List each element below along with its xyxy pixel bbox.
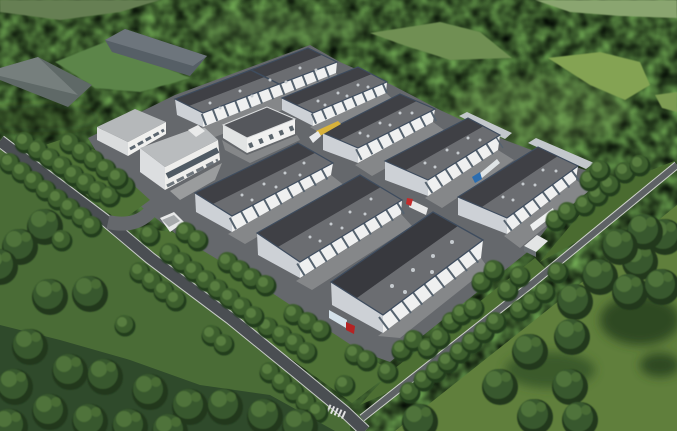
building: D warehouse (323, 94, 448, 176)
tree rows right upper (546, 155, 650, 232)
forest light patches (0, 12, 630, 145)
outer road right (362, 165, 677, 418)
building: G warehouse (195, 143, 345, 244)
distant warehouse left (0, 57, 92, 107)
green strip left of site (30, 140, 150, 222)
truck: yellow and white (309, 121, 341, 143)
canopy gate right (524, 235, 548, 257)
crosswalk (328, 408, 346, 416)
roof strip behind building E (459, 112, 512, 139)
site pavement (88, 45, 590, 362)
outer tree row on lower road (130, 262, 328, 424)
right forest cluster (557, 214, 677, 320)
building: C small warehouse (222, 107, 300, 163)
building: H warehouse (257, 175, 412, 290)
tree rows right inner (378, 260, 568, 404)
truck: blue (472, 159, 500, 183)
truck: white on right (530, 208, 555, 231)
tree shadows lower right (505, 295, 677, 388)
building: I warehouse (331, 212, 488, 338)
green median left (140, 228, 392, 403)
building: A double warehouse (175, 48, 345, 137)
fields in the distance (0, 0, 677, 112)
left trees on grass (0, 209, 136, 336)
gate house (160, 212, 184, 232)
tree row median lower (160, 243, 264, 328)
outer road left (0, 141, 365, 431)
roof strip behind building F (528, 138, 594, 169)
distant warehouse centre (105, 29, 207, 76)
grassy lower left (0, 145, 350, 431)
grassy lower right (395, 205, 677, 431)
truck: red (406, 198, 428, 215)
building: main office (140, 125, 222, 200)
forest lower left (0, 325, 335, 431)
big trees lower right (402, 319, 598, 431)
road connector (108, 212, 150, 224)
building: B warehouse (282, 67, 398, 136)
building: small office (97, 109, 166, 156)
green strip right (360, 258, 545, 405)
building: E warehouse (385, 118, 514, 208)
truck: red tractor by building I (329, 310, 355, 334)
tree row median upper (140, 222, 378, 396)
building: F warehouse (458, 147, 590, 248)
tree rows left top (0, 132, 136, 238)
